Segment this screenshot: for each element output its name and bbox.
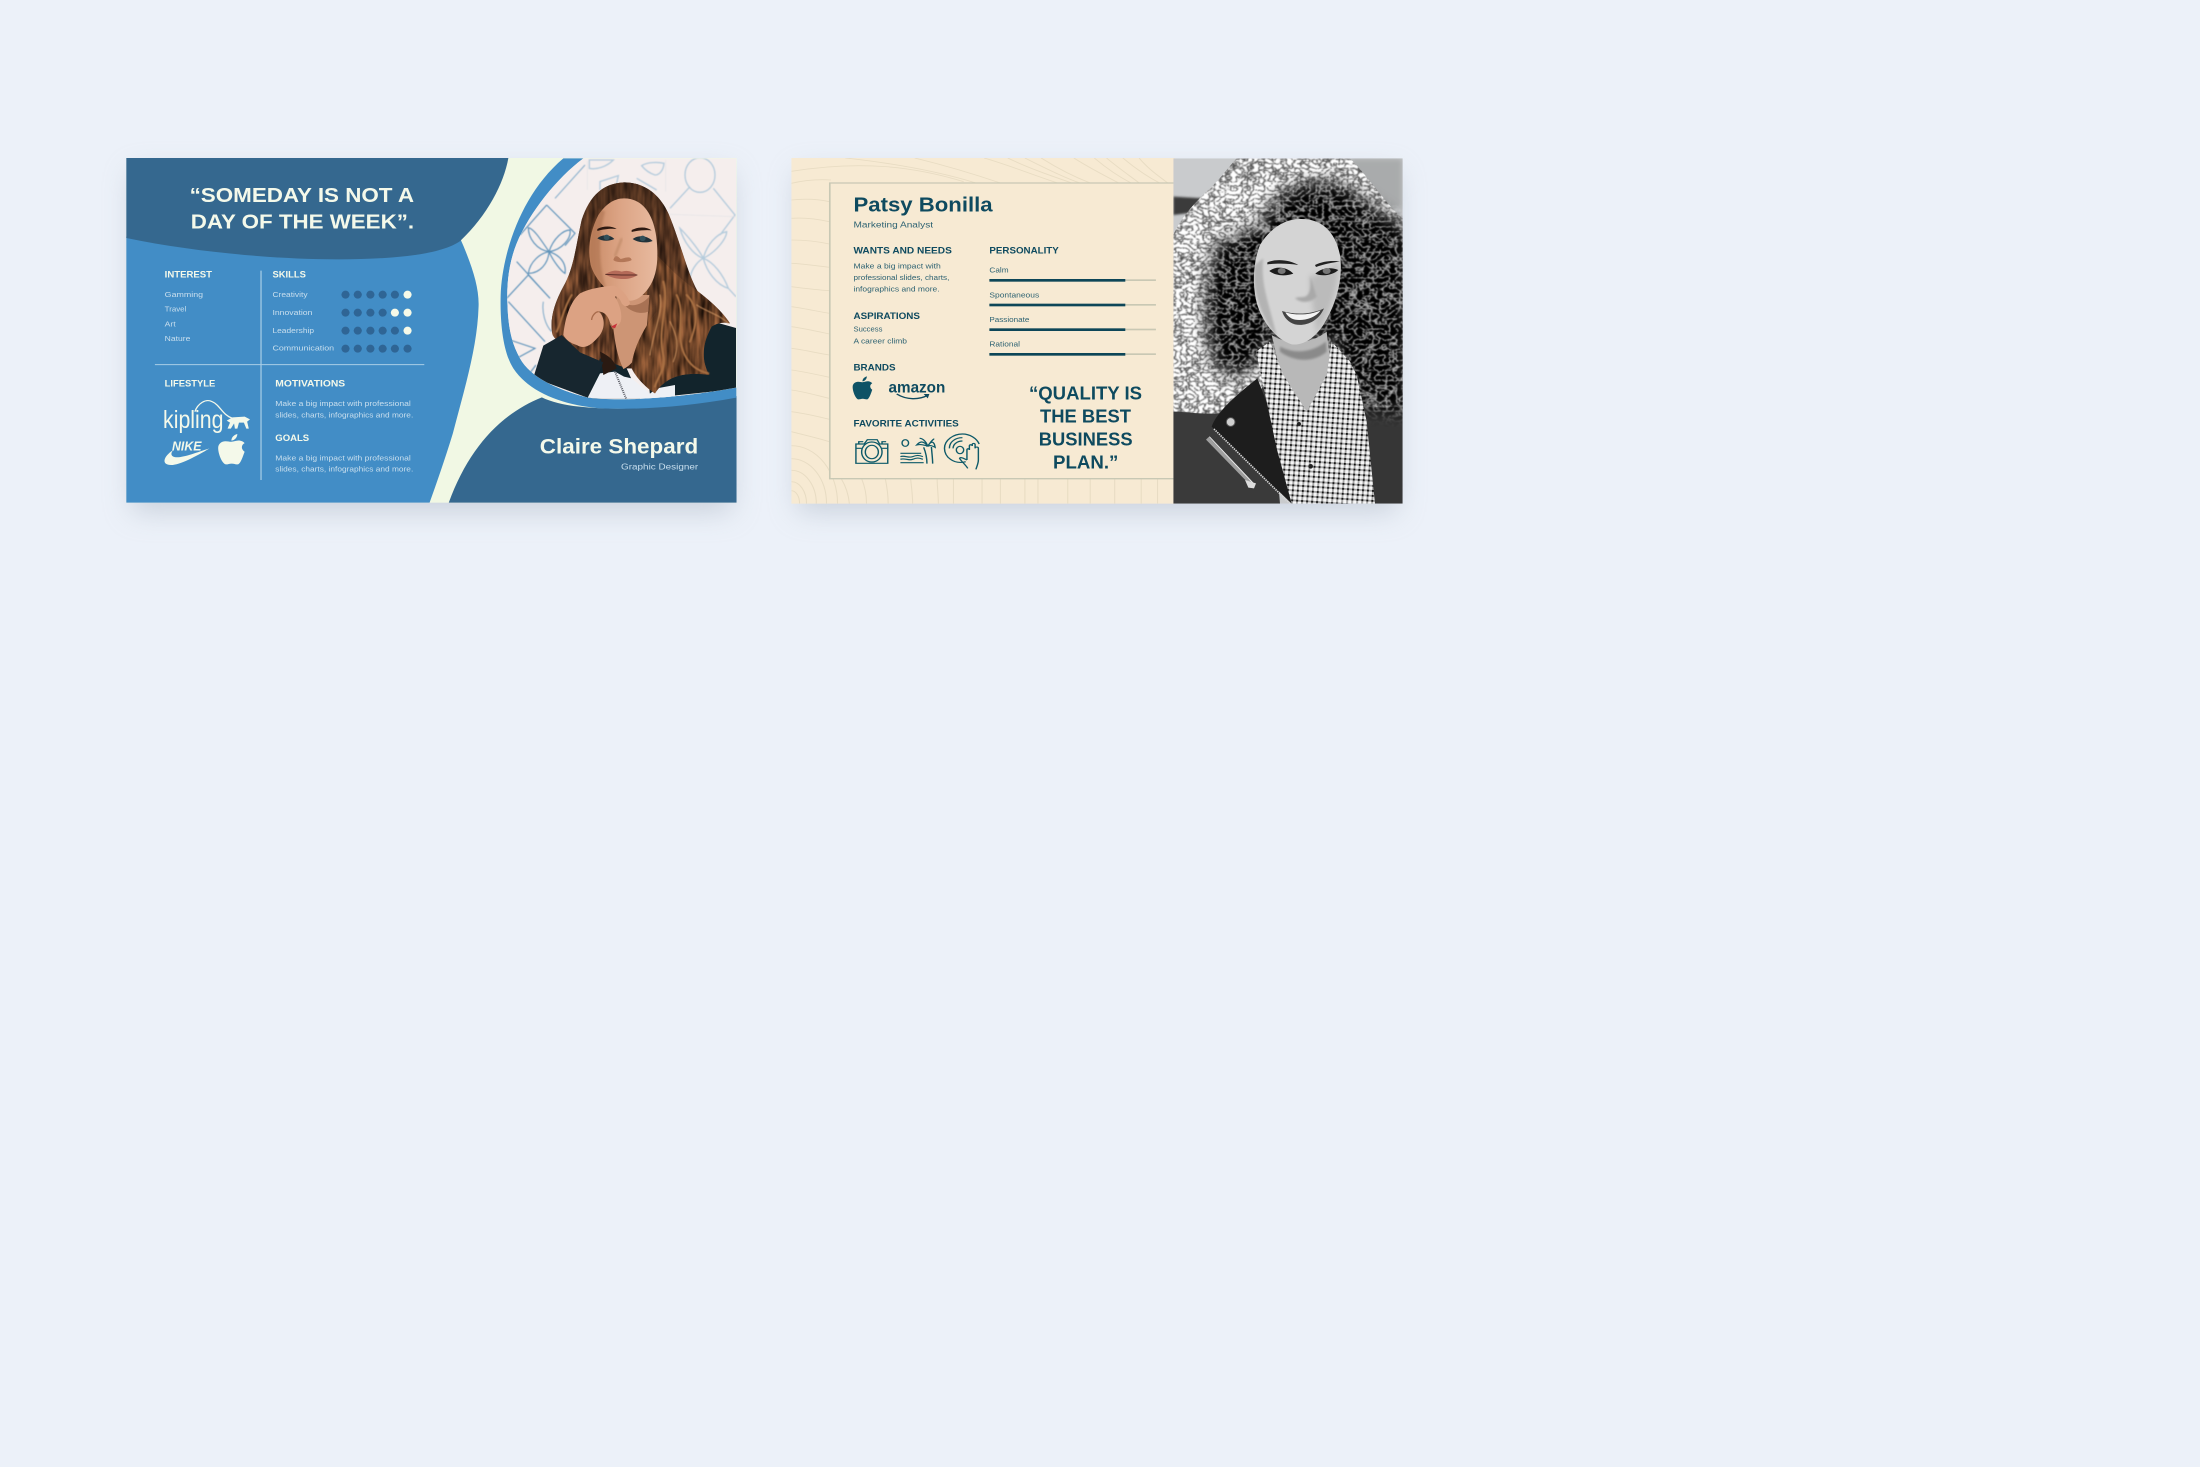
zipper <box>1214 429 1290 504</box>
hair back <box>552 182 700 368</box>
contour line pattern <box>791 158 1168 504</box>
divider lines <box>155 271 424 480</box>
section: wants and needs: infographics and more. <box>853 285 940 293</box>
section: personality: Rational <box>989 340 1020 348</box>
quote: “SOMEDAY IS NOT A <box>190 183 414 206</box>
smile <box>1282 308 1324 325</box>
neck <box>613 295 649 369</box>
section: personality: Calm <box>989 266 1009 274</box>
hand <box>563 286 630 347</box>
logo: amazon: amazon <box>889 378 945 396</box>
section: skills: Leadership <box>272 326 314 335</box>
section: interest: Gamming <box>165 290 203 299</box>
panel: Patsy Bonilla persona card <box>791 158 1410 504</box>
quote: “QUALITY IS <box>1029 383 1142 404</box>
section: wants and needs: professional slides, charts, <box>853 273 949 282</box>
neck <box>1272 332 1330 413</box>
sleeve <box>533 335 603 398</box>
tile pattern <box>507 165 585 375</box>
section: brands: BRANDS <box>853 364 896 373</box>
section: favorite activities: FAVORITE ACTIVITIES <box>853 419 959 429</box>
section: motivations: MOTIVATIONS <box>275 380 345 389</box>
quote: PLAN.” <box>1053 452 1118 473</box>
shirt <box>587 372 675 398</box>
logo: apple <box>853 376 872 399</box>
section: personality: Passionate <box>989 315 1030 324</box>
logo: apple <box>218 434 245 464</box>
section: motivations <box>275 380 413 419</box>
photo background <box>1173 158 1403 504</box>
quote: DAY OF THE WEEK”. <box>191 210 414 233</box>
section: interest: INTEREST <box>165 270 213 280</box>
logo: kipling: kipling <box>163 405 223 433</box>
quote <box>1029 383 1142 473</box>
name and role <box>853 193 993 230</box>
quote: BUSINESS <box>1039 429 1133 450</box>
section: interest: Nature <box>165 334 191 343</box>
card 1 text and charts <box>155 183 699 480</box>
quote: THE BEST <box>1040 407 1131 427</box>
dark inner curls <box>1205 181 1410 415</box>
photo: Claire portrait with ring <box>500 158 737 409</box>
section: goals <box>275 434 413 473</box>
shadow: card 2 <box>797 172 1397 512</box>
quote <box>190 183 414 233</box>
section: aspirations <box>853 312 920 345</box>
brows <box>597 226 652 232</box>
section: personality: PERSONALITY <box>989 246 1059 256</box>
dark hair gap beside neck <box>600 352 617 375</box>
card 1 base shapes <box>126 158 737 503</box>
section: favorite activities <box>853 419 979 469</box>
jacket lapel <box>1212 378 1292 504</box>
name and role <box>540 435 699 472</box>
icon: beach and palm <box>900 438 935 464</box>
section: motivations: Make a big impact with professional <box>275 399 411 408</box>
inner panel <box>830 183 1173 479</box>
blue ring around photo <box>501 158 736 409</box>
photo: Patsy portrait in black and white <box>1173 158 1410 504</box>
icon: camera <box>856 440 888 463</box>
front hair mass over jacket <box>632 255 730 393</box>
section: interest <box>165 270 213 343</box>
section: aspirations: A career climb <box>853 336 907 345</box>
logo: nike: NIKE <box>172 439 202 453</box>
section: aspirations: Success <box>853 325 882 333</box>
section: goals: GOALS <box>275 434 309 444</box>
light outer curls <box>1173 158 1403 414</box>
face <box>589 198 657 301</box>
section: skills <box>272 270 412 353</box>
face <box>1254 219 1341 345</box>
section: goals: Make a big impact with professional <box>275 453 411 462</box>
section: interest: Art <box>165 319 176 328</box>
brows and eyes <box>1267 260 1340 267</box>
name and role: Patsy Bonilla <box>853 193 993 216</box>
section: wants and needs: WANTS AND NEEDS <box>853 247 952 256</box>
nose <box>613 256 632 262</box>
section: personality: Spontaneous <box>989 291 1039 299</box>
name and role: Marketing Analyst <box>853 221 933 230</box>
personality bars <box>989 279 1156 356</box>
lips <box>605 271 637 279</box>
section: skills: Creativity <box>272 290 308 299</box>
section: skills: Communication <box>272 344 334 352</box>
jacket <box>587 322 737 398</box>
section: lifestyle <box>163 380 250 465</box>
icon: vinyl disc and hand <box>944 434 979 469</box>
section: wants and needs: Make a big impact with <box>853 262 941 270</box>
section: wants and needs <box>853 247 952 293</box>
section: brands <box>853 364 945 399</box>
section: skills: Innovation <box>272 308 313 317</box>
section: goals: slides, charts, infographics and more. <box>275 465 413 473</box>
jacket <box>1173 382 1280 504</box>
section: skills: SKILLS <box>272 270 306 280</box>
skill dot ratings <box>341 291 412 353</box>
card 2 background <box>791 158 1175 504</box>
panel: Claire Shepard persona card <box>126 158 737 503</box>
section: aspirations: ASPIRATIONS <box>853 312 920 322</box>
section: motivations: slides, charts, infographics and more. <box>275 410 413 419</box>
nose <box>1295 277 1317 302</box>
hair highlights <box>557 282 708 387</box>
section: personality <box>989 246 1156 356</box>
name and role: Claire Shepard <box>540 435 698 459</box>
section: lifestyle: LIFESTYLE <box>165 380 216 389</box>
shadow: card 1 <box>132 172 732 512</box>
eyes <box>597 235 653 242</box>
name and role: Graphic Designer <box>621 462 699 472</box>
gingham shirt <box>1256 342 1375 504</box>
section: interest: Travel <box>165 305 186 313</box>
